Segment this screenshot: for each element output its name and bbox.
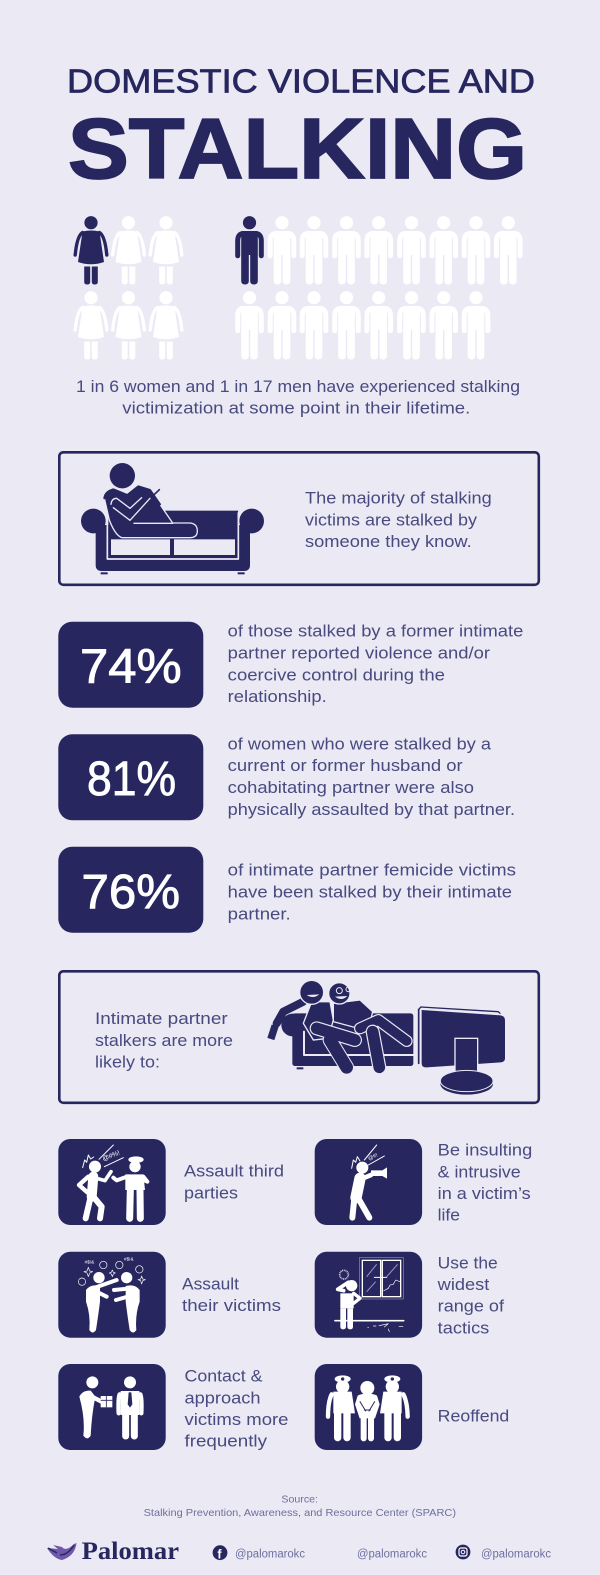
label: parties: [184, 1183, 238, 1202]
label: widest: [437, 1275, 490, 1294]
social: instagram: @palomarokc: [481, 1549, 551, 1561]
label: & intrusive: [438, 1162, 521, 1182]
panel text: The majority of stalking: [305, 488, 492, 507]
icon: man with megaphone: @#!: [367, 1153, 379, 1162]
label: [437, 1253, 504, 1337]
source: [144, 1494, 456, 1519]
label: Reoffend: [438, 1407, 509, 1426]
label: approach: [184, 1388, 260, 1408]
stat: 74%: of those stalked by a former intimate: [228, 622, 523, 640]
icon: couple on couch with television: [267, 980, 505, 1095]
stat: 81%: physically assaulted by that partner.: [228, 800, 515, 819]
label: victims more: [184, 1410, 288, 1429]
label: in a victim’s: [438, 1184, 531, 1203]
item: be insulting and intrusive: [315, 1139, 532, 1225]
label: their victims: [182, 1296, 281, 1315]
icon: man with megaphone: [352, 1145, 387, 1218]
social: facebook: @palomarokc: [235, 1549, 305, 1561]
label: [184, 1162, 284, 1202]
label: [182, 1274, 281, 1315]
logo: Palomar: Palomar: [82, 1538, 179, 1565]
stat: 81%: 81%: [87, 753, 176, 806]
icon: person reclining on couch: [81, 463, 264, 574]
label: Contact &: [184, 1367, 263, 1386]
title: [67, 63, 535, 197]
source: Stalking Prevention, Awareness, and Resource Center (SPARC): [144, 1507, 456, 1519]
title: DOMESTIC VIOLENCE AND: [67, 63, 535, 100]
label: Assault third: [184, 1162, 284, 1181]
label: frequently: [184, 1432, 268, 1451]
icon: man shouting at police officer: @#%!: [101, 1149, 121, 1163]
stat: 81%: [58, 734, 515, 820]
panel: majority know their stalker: [59, 452, 539, 585]
label: [438, 1141, 532, 1225]
icon: two people arguing: #$!&: [124, 1256, 134, 1261]
stat: 76%: have been stalked by their intimate: [228, 882, 512, 902]
icon: man shouting at police officer: [79, 1145, 147, 1218]
stat: 74%: [58, 622, 523, 708]
label: Be insulting: [438, 1141, 532, 1160]
item: contact and approach victims: [58, 1364, 288, 1451]
label: [184, 1367, 288, 1451]
title: STALKING: [68, 102, 527, 197]
social: facebook: f: [217, 1548, 222, 1562]
panel: intimate partner stalkers: [59, 971, 539, 1103]
panel text: someone they know.: [305, 532, 472, 551]
label: range of: [438, 1296, 504, 1316]
intro text: [76, 377, 520, 418]
social: instagram: [456, 1545, 551, 1561]
stat: 74%: partner reported violence and/or: [228, 644, 490, 662]
panel text: [305, 488, 492, 551]
item: assault third parties: [58, 1139, 284, 1225]
label: Assault: [182, 1274, 239, 1293]
item: reoffend: [315, 1364, 509, 1450]
pictogram: 1 in 17 men: [238, 216, 520, 360]
label: tactics: [438, 1318, 489, 1337]
item: assault their victims: [58, 1252, 281, 1338]
panel text: [95, 1009, 233, 1072]
icon: two people arguing: #$!&: [85, 1260, 95, 1265]
intro text: 1 in 6 women and 1 in 17 men have experienced stalking: [76, 377, 520, 396]
stat: 74%: coercive control during the: [228, 666, 445, 684]
icon: two people arguing: [78, 1256, 145, 1332]
stat: 81%: of women who were stalked by a: [228, 734, 492, 753]
label: Use the: [438, 1253, 498, 1272]
icon: man at broken window: [335, 1258, 404, 1332]
stat: 76%: of intimate partner femicide victims: [228, 861, 516, 880]
stat: 81%: cohabitating partner were also: [228, 778, 474, 797]
stat: 74%: 74%: [80, 641, 182, 694]
pictogram: 1 in 6 women: [75, 216, 182, 360]
stat: 81%: current or former husband or: [228, 756, 463, 775]
stat: 76%: partner.: [228, 904, 291, 924]
logo: Palomar: [47, 1538, 179, 1565]
social: twitter handle: @palomarokc: [357, 1549, 427, 1561]
icon: man giving a gift: [79, 1376, 142, 1438]
label: life: [438, 1206, 460, 1225]
icon: two officers escorting a person: [328, 1375, 408, 1438]
panel text: victims are stalked by: [305, 510, 478, 529]
source: Source:: [281, 1494, 318, 1506]
social: facebook: [213, 1545, 305, 1562]
panel text: likely to:: [95, 1052, 160, 1072]
item: use the widest range of tactics: [315, 1252, 504, 1338]
intro text: victimization at some point in their lifetime.: [122, 398, 470, 418]
stat: 76%: 76%: [82, 866, 180, 919]
stat: 74%: relationship.: [228, 687, 327, 706]
stat: 76%: [58, 847, 516, 933]
panel text: Intimate partner: [95, 1009, 228, 1028]
panel text: stalkers are more: [95, 1031, 233, 1050]
